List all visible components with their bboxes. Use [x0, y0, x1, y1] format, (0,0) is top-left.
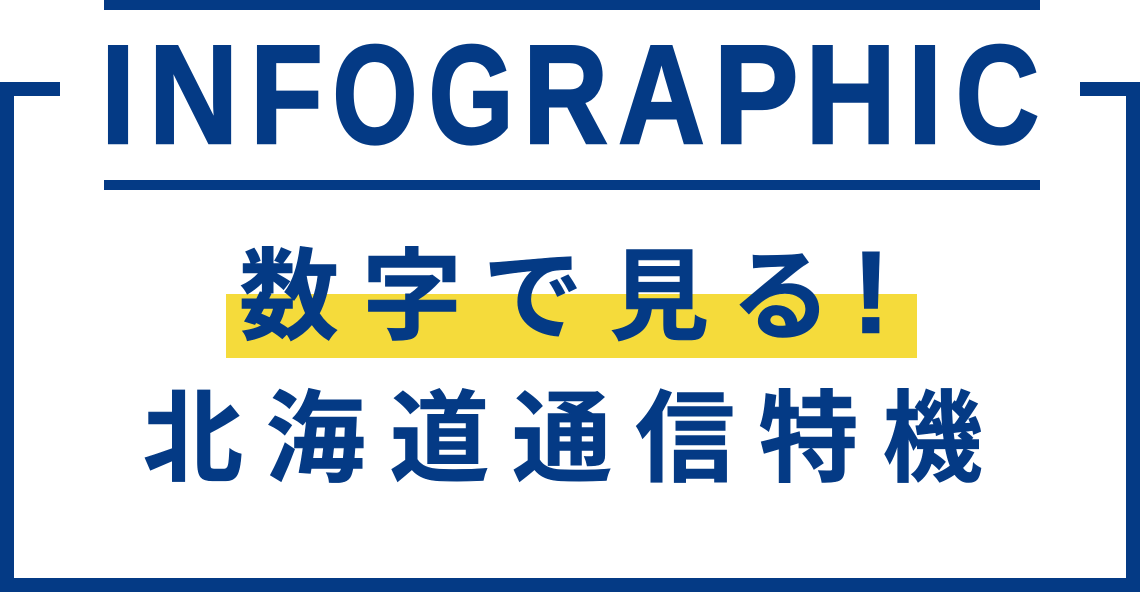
title: INFOGRAPHIC: F: [250, 16, 323, 173]
heading: 数字で見る!: 数: [239, 242, 339, 354]
title: INFOGRAPHIC: I: [101, 17, 135, 174]
title: INFOGRAPHIC: R: [523, 17, 608, 173]
bottom rule: [104, 180, 1040, 190]
heading: 北海道通信特機: 道: [390, 384, 490, 496]
title: INFOGRAPHIC: G: [428, 16, 514, 173]
yellow highlight band: [226, 294, 917, 358]
heading: 北海道通信特機: 信: [635, 384, 735, 496]
heading: 数字で見る!: 字: [362, 242, 462, 354]
heading: 北海道通信特機: 特: [758, 384, 858, 496]
heading: 数字で見る!: 見: [609, 242, 709, 354]
title: INFOGRAPHIC: A: [618, 16, 705, 173]
heading: 北海道通信特機: 海: [266, 384, 366, 496]
title: INFOGRAPHIC: O: [332, 16, 418, 173]
heading: 数字で見る!: で: [483, 242, 583, 354]
title: INFOGRAPHIC: I: [908, 17, 942, 174]
title: INFOGRAPHIC: P: [714, 16, 799, 173]
title: INFOGRAPHIC: C: [956, 16, 1039, 174]
heading: 北海道通信特機: 北: [143, 384, 243, 496]
heading: 数字で見る!: る: [731, 242, 831, 354]
heading: 数字で見る!: !: [851, 227, 891, 359]
title: INFOGRAPHIC: [101, 16, 1039, 174]
title: INFOGRAPHIC: N: [149, 17, 238, 174]
heading: 北海道通信特機: 機: [882, 384, 982, 496]
top rule: [104, 0, 1040, 10]
title: INFOGRAPHIC: H: [805, 17, 896, 174]
heading: 北海道通信特機: 通: [512, 384, 612, 496]
